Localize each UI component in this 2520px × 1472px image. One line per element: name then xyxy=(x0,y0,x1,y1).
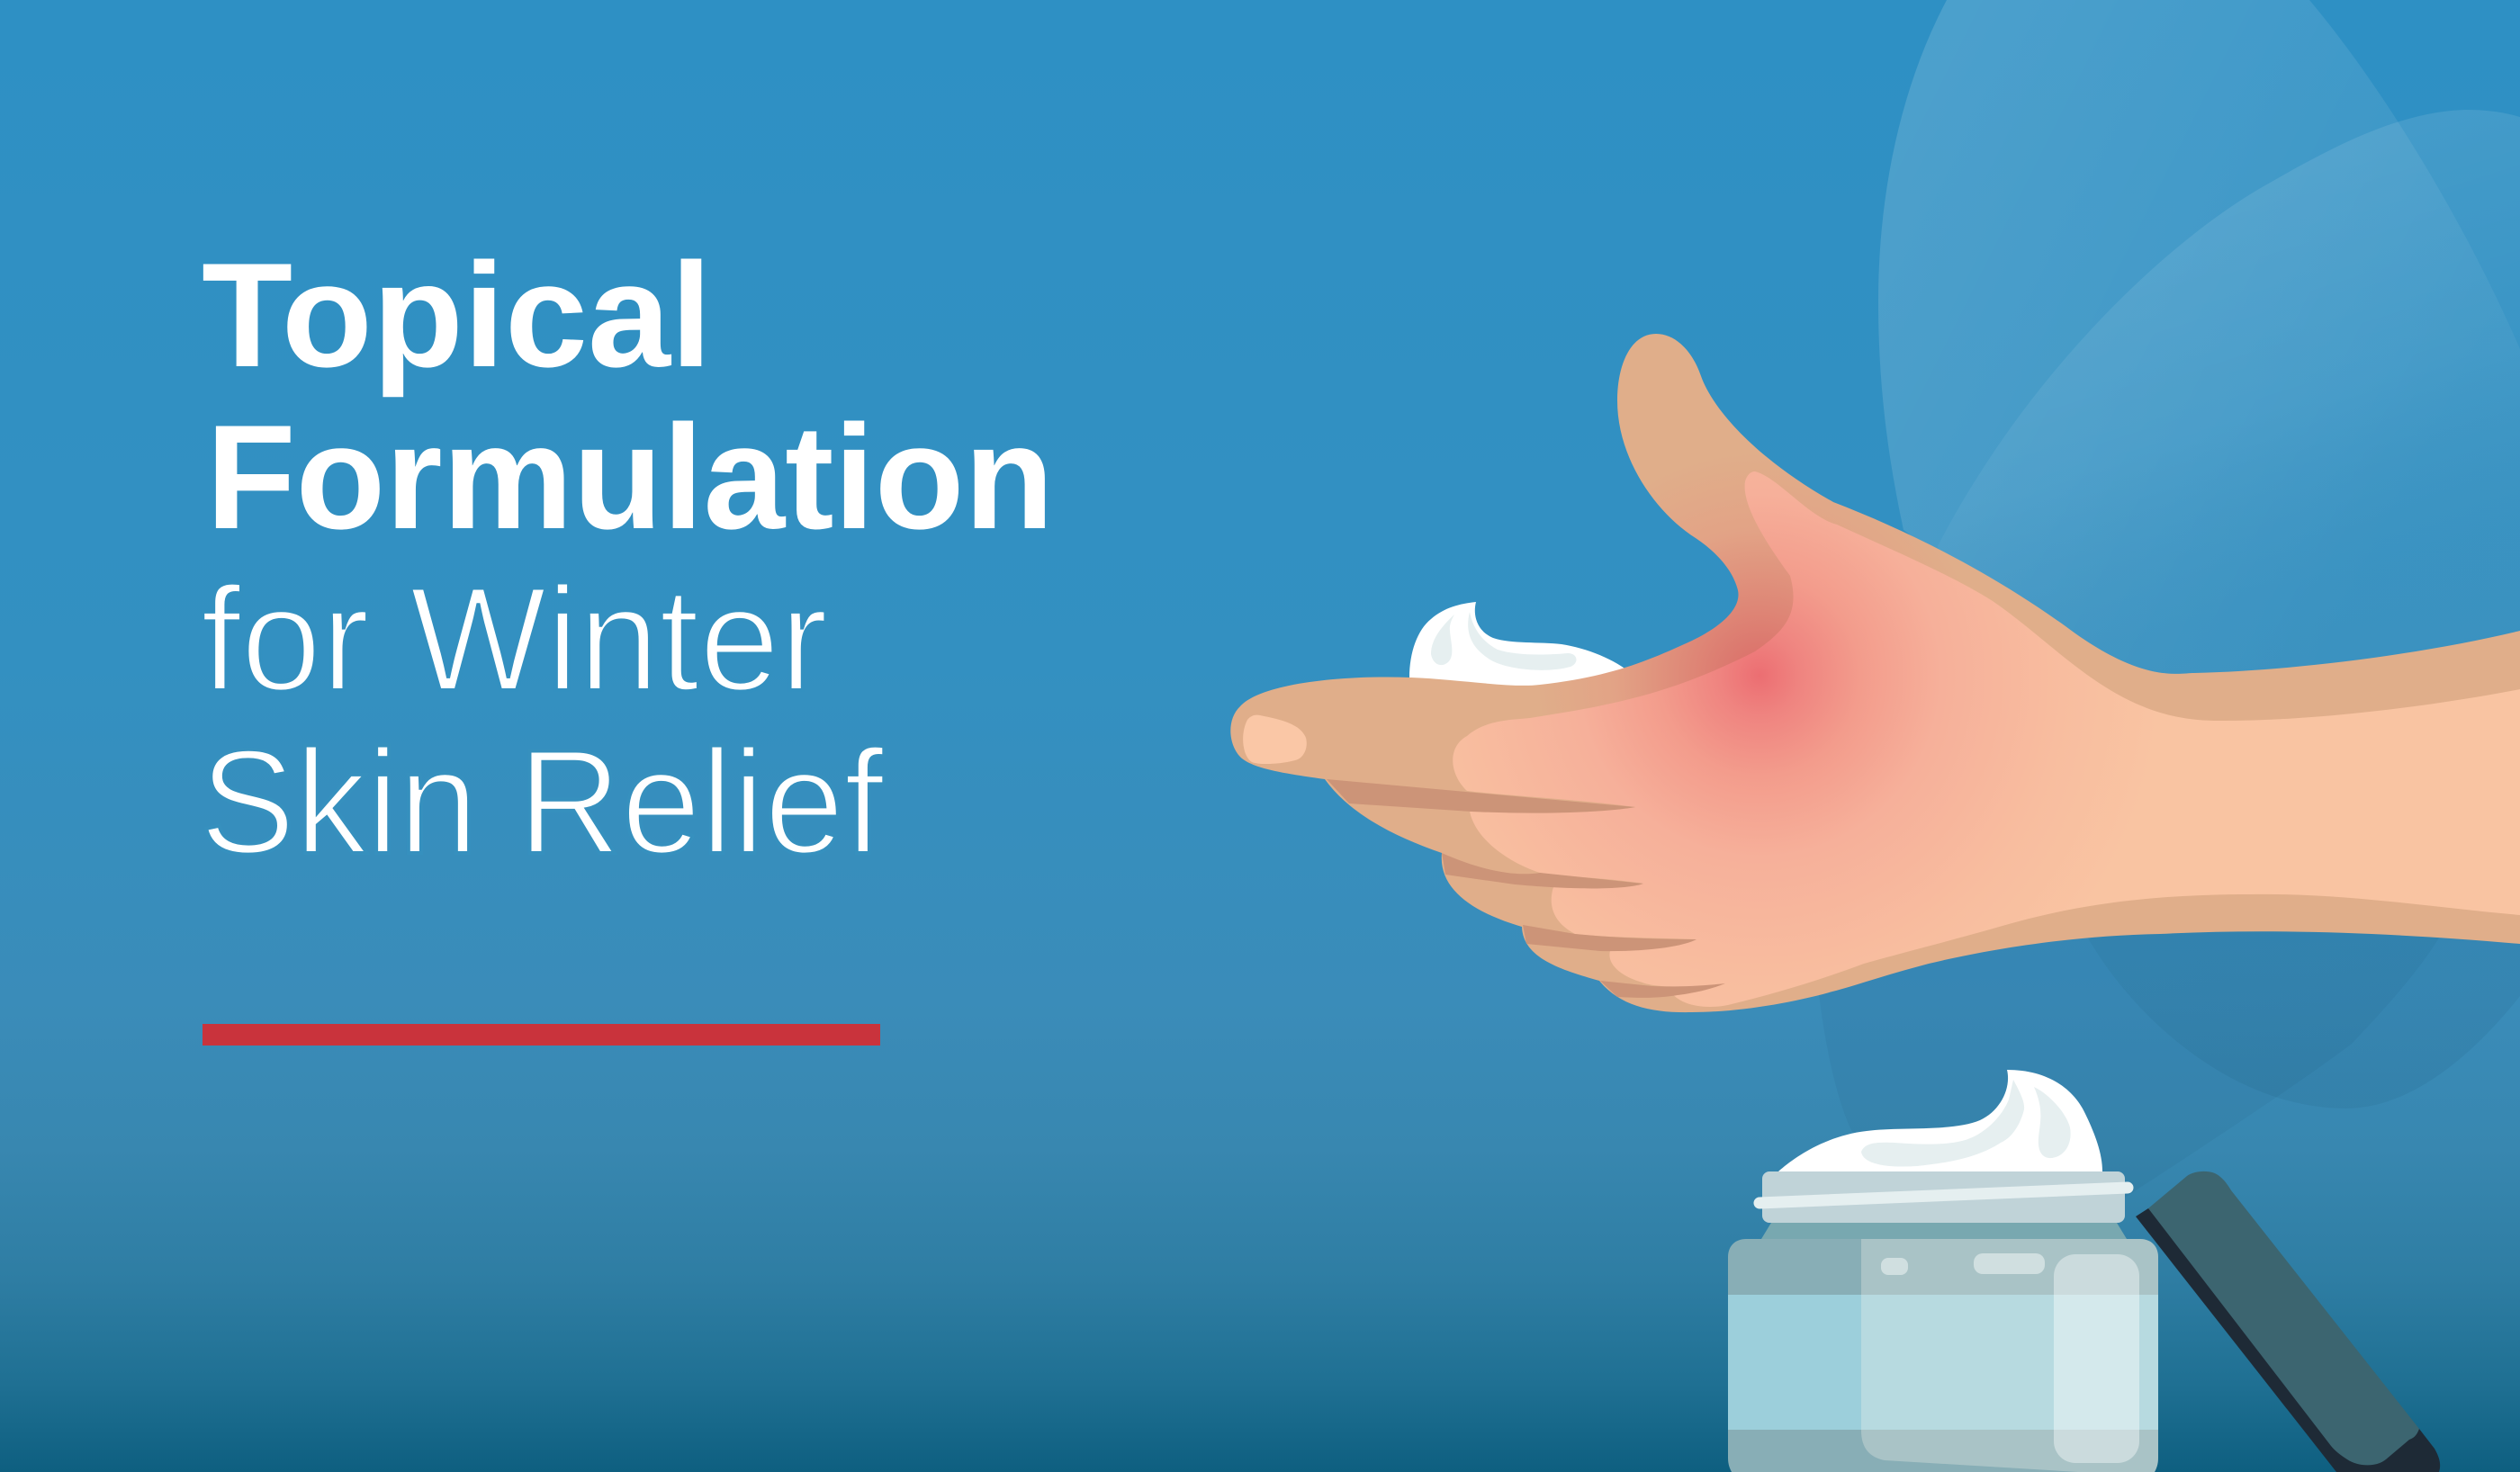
cream jar xyxy=(1728,1070,2158,1472)
hand xyxy=(1230,334,2520,1012)
cream swirl xyxy=(1778,1070,2102,1171)
cream on hand xyxy=(1409,602,1634,693)
leaning jar lid xyxy=(2136,1171,2440,1472)
thumb nail xyxy=(1243,715,1307,764)
red accent bar xyxy=(202,1024,880,1046)
title: for Winter xyxy=(201,556,828,722)
ring highlight xyxy=(1760,1188,2128,1203)
cream shadow left xyxy=(1861,1080,2024,1167)
hand back silhouette xyxy=(1230,334,2520,1012)
title: Skin Relief xyxy=(200,719,885,884)
title xyxy=(200,232,1054,884)
jar neck xyxy=(1761,1223,2127,1239)
jar label band xyxy=(1728,1295,2158,1430)
jar large pill xyxy=(1974,1253,2045,1274)
title: Topical xyxy=(202,232,712,398)
finger creases xyxy=(1327,779,1725,998)
jar body xyxy=(1728,1239,2158,1472)
jar glass overlay xyxy=(1861,1239,2158,1472)
background leaf shapes xyxy=(1814,0,2520,1260)
hand front skin with redness xyxy=(1453,471,2520,1007)
jar cap ring xyxy=(1762,1171,2125,1223)
title: Formulation xyxy=(206,394,1054,560)
jar small pill xyxy=(1881,1258,1908,1275)
jar highlight xyxy=(2054,1254,2139,1463)
cream shadow right xyxy=(2034,1087,2071,1158)
